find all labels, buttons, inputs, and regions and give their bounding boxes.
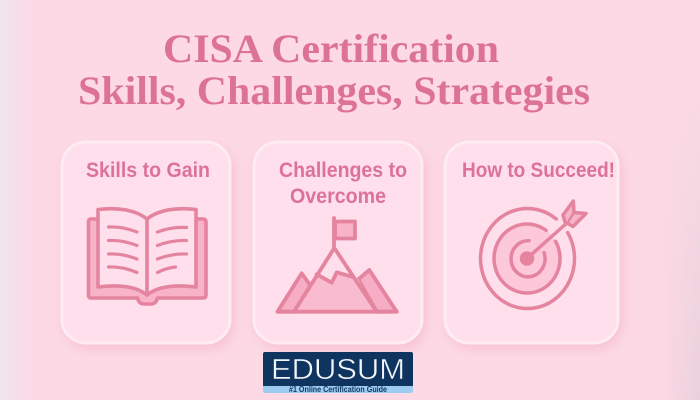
heading: challenges to overcome: Overcome xyxy=(290,185,386,208)
icon: mountain with flag xyxy=(278,218,397,312)
title xyxy=(78,26,590,113)
logo: EDUSUM: #1 Online Certification Guide xyxy=(289,385,387,394)
icon: open book xyxy=(88,209,206,304)
heading: challenges to overcome: Challenges to xyxy=(279,159,407,182)
title: Skills, Challenges, Strategies xyxy=(78,68,590,113)
icon: target with arrow xyxy=(481,201,586,309)
heading: skills to gain: Skills to Gain xyxy=(86,159,210,182)
heading: how to succeed: How to Succeed! xyxy=(462,159,615,182)
panel: skills to gain xyxy=(62,142,230,343)
logo: EDUSUM xyxy=(263,352,413,394)
title: CISA Certification xyxy=(163,26,499,71)
logo: EDUSUM: EDUSUM xyxy=(271,354,405,386)
panel: challenges to overcome xyxy=(254,142,422,343)
heading: challenges to overcome xyxy=(279,159,407,208)
panel: how to succeed xyxy=(445,142,618,343)
